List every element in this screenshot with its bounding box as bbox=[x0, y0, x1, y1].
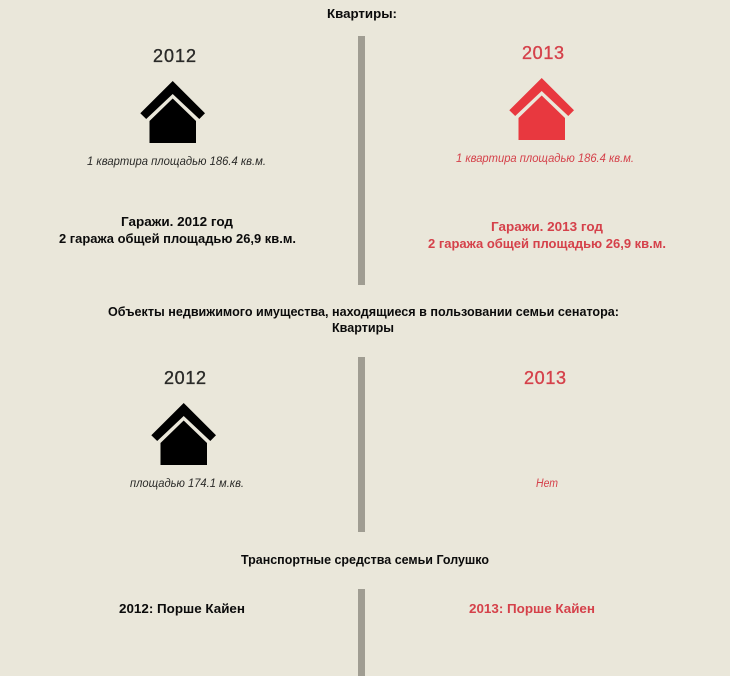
year 2013: 2013 bbox=[524, 368, 566, 388]
garages 2012 bbox=[59, 214, 296, 246]
icon: house black bbox=[151, 403, 216, 465]
divider: apartments bbox=[358, 36, 365, 285]
garages 2013: Гаражи. 2013 год bbox=[491, 219, 604, 234]
heading: vehicles: Транспортные средства семьи Голушко bbox=[241, 552, 489, 567]
panel: apartments and garages 2012 bbox=[59, 46, 296, 246]
panel: property in use 2012 bbox=[130, 368, 244, 490]
vehicle 2012: 2012: Порше Кайен bbox=[119, 601, 245, 616]
year 2013: 2013 bbox=[522, 43, 564, 63]
year 2012: 2012 bbox=[153, 46, 196, 66]
garages 2013: 2 гаража общей площадью 26,9 кв.м. bbox=[428, 236, 666, 251]
apartment note 2013: 1 квартира площадью 186.4 кв.м. bbox=[456, 153, 634, 165]
garages 2012: Гаражи. 2012 год bbox=[121, 214, 234, 229]
garages 2012: 2 гаража общей площадью 26,9 кв.м. bbox=[59, 231, 296, 246]
heading: property in use: Квартиры bbox=[332, 320, 394, 335]
panel: property in use 2013 bbox=[524, 368, 566, 490]
heading: property in use: Объекты недвижимого имущества, находящиеся в пользовании семьи сенатора: bbox=[108, 304, 619, 319]
heading: apartments: Квартиры: bbox=[327, 6, 397, 21]
divider: property in use bbox=[358, 357, 365, 532]
divider: vehicles bbox=[358, 589, 365, 676]
icon: house red bbox=[509, 78, 574, 140]
vehicle 2013: 2013: Порше Кайен bbox=[469, 601, 595, 616]
panel: apartments and garages 2013 bbox=[428, 43, 666, 251]
heading: property in use bbox=[108, 304, 619, 335]
apartment note 2012: 1 квартира площадью 186.4 кв.м. bbox=[87, 156, 266, 168]
year 2012: 2012 bbox=[164, 368, 206, 388]
icon: house black bbox=[140, 81, 205, 143]
area note 2013: Нет bbox=[536, 478, 558, 490]
area note 2012: площадью 174.1 м.кв. bbox=[130, 478, 244, 490]
garages 2013 bbox=[428, 219, 666, 251]
